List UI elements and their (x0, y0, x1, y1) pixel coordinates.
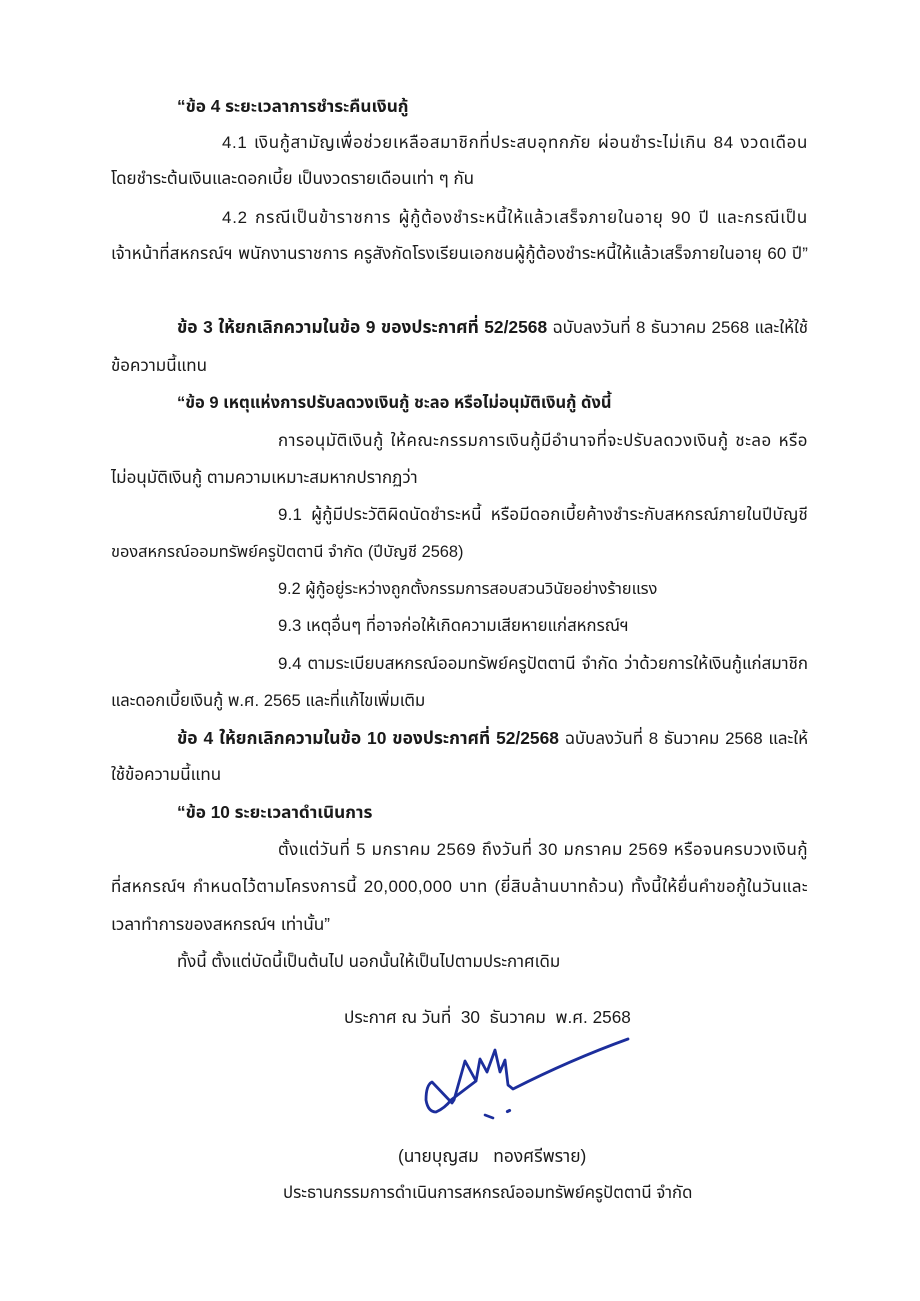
text block: clause 4 repayment period: 4.2 กรณีเป็นข้าราชการ ผู้กู้ต้องชำระหนี้ให้แล้วเสร็จภายในอายุ 90 ปี และกรณีเป็น (222, 208, 808, 227)
text block: clause 10 operating period: เวลาทำการของสหกรณ์ฯ เท่านั้น” (111, 914, 330, 934)
text block: clause 9 reasons for reducing or refusing a loan: 9.3 เหตุอื่นๆ ที่อาจก่อให้เกิดความเสียหายแก่สหกรณ์ฯ (278, 616, 629, 635)
text block: clause 10 operating period (111, 802, 808, 971)
signatory name: (นายบุญสม ทองศรีพราย) (398, 1146, 586, 1166)
text block: item 3 cancel clause 9: ข้อความนี้แทน (111, 356, 207, 375)
text block: clause 9 reasons for reducing or refusing a loan: “ข้อ 9 เหตุแห่งการปรับลดวงเงินกู้ ชะลอ หรือไม่อนุมัติเงินกู้ ดังนี้ (177, 394, 612, 412)
text block: clause 4 repayment period: “ข้อ 4 ระยะเวลาการชำระคืนเงินกู้ (177, 96, 409, 116)
text block: clause 4 repayment period (111, 96, 808, 264)
text block: clause 4 repayment period: 4.1 เงินกู้สามัญเพื่อช่วยเหลือสมาชิกที่ประสบอุทกภัย ผ่อนชำระไม่เกิน 84 งวดเดือน (222, 133, 808, 152)
text block: clause 9 reasons for reducing or refusing a loan: 9.2 ผู้กู้อยู่ระหว่างถูกตั้งกรรมการสอบสวนวินัยอย่างร้ายแรง (278, 580, 657, 598)
text block: item 4 cancel clause 10 (111, 726, 808, 784)
text block: clause 10 operating period: “ข้อ 10 ระยะเวลาดำเนินการ (177, 802, 372, 822)
text block: clause 10 operating period: ทั้งนี้ ตั้งแต่บัดนี้เป็นต้นไป นอกนั้นให้เป็นไปตามประกาศเดิม (177, 952, 560, 971)
text block: clause 9 reasons for reducing or refusing a loan (110, 390, 808, 710)
text block: item 4 cancel clause 10: ใช้ข้อความนี้แทน (111, 765, 221, 784)
signatory title: ประธานกรรมการดำเนินการสหกรณ์ออมทรัพย์ครูปัตตานี จำกัด (283, 1183, 692, 1202)
text block: clause 10 operating period: ตั้งแต่วันที่ 5 มกราคม 2569 ถึงวันที่ 30 มกราคม 2569 หรือจนครบวงเงินกู้ (278, 840, 808, 859)
text block: clause 9 reasons for reducing or refusing a loan: 9.1 ผู้กู้มีประวัติผิดนัดชำระหนี้ หรือมีดอกเบี้ยค้างชำระกับสหกรณ์ภายในปีบัญชี (278, 505, 808, 524)
text block: clause 10 operating period: ที่สหกรณ์ฯ กำหนดไว้ตามโครงการนี้ 20,000,000 บาท (ยี่สิบล้านบาทถ้วน) ทั้งนี้ให้ยื่นคำขอกู้ในวันและ (111, 877, 808, 896)
text block: clause 4 repayment period: เจ้าหน้าที่สหกรณ์ฯ พนักงานราชการ ครูสังกัดโรงเรียนเอกชนผู้กู้ต้องชำระหนี้ให้แล้วเสร็จภายในอายุ 60 ปี” (111, 244, 808, 263)
text block: clause 9 reasons for reducing or refusing a loan: ไม่อนุมัติเงินกู้ ตามความเหมาะสมหากปรากฏว่า (111, 468, 418, 487)
text block: item 3 cancel clause 9: ข้อ 3 ให้ยกเลิกความในข้อ 9 ของประกาศที่ 52/2568 ฉบับลงวันที่ 8 ธันวาคม 2568 และให้ใช้ (177, 317, 808, 337)
text block: item 3 cancel clause 9 (111, 314, 808, 375)
text block: item 4 cancel clause 10: ข้อ 4 ให้ยกเลิกความในข้อ 10 ของประกาศที่ 52/2568 ฉบับลงวันที่ 8 ธันวาคม 2568 และให้ (177, 728, 808, 748)
text block: clause 4 repayment period: โดยชำระต้นเงินและดอกเบี้ย เป็นงวดรายเดือนเท่า ๆ กัน (111, 169, 474, 188)
text block: clause 9 reasons for reducing or refusing a loan: การอนุมัติเงินกู้ ให้คณะกรรมการเงินกู้มีอำนาจที่จะปรับลดวงเงินกู้ ชะลอ หรือ (278, 431, 808, 450)
date line: ประกาศ ณ วันที่ 30 ธันวาคม พ.ศ. 2568 (344, 1007, 631, 1027)
text block: clause 9 reasons for reducing or refusing a loan: และดอกเบี้ยเงินกู้ พ.ศ. 2565 และที่แก้ไขเพิ่มเติม (111, 691, 425, 710)
text block: clause 9 reasons for reducing or refusing a loan: ของสหกรณ์ออมทรัพย์ครูปัตตานี จำกัด (ปีบัญชี 2568) (111, 543, 464, 561)
text block: clause 9 reasons for reducing or refusing a loan: 9.4 ตามระเบียบสหกรณ์ออมทรัพย์ครูปัตตานี จำกัด ว่าด้วยการให้เงินกู้แก่สมาชิก (278, 654, 808, 673)
